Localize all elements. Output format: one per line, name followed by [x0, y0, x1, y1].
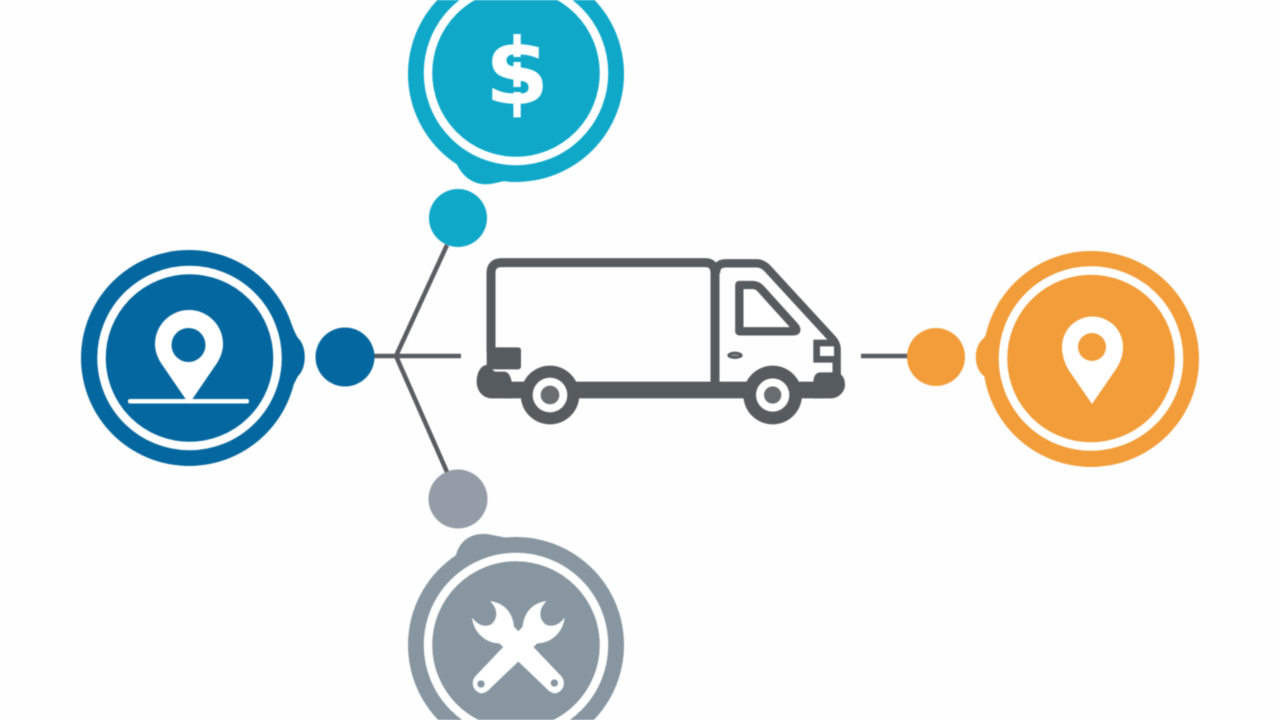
van door handle: [727, 352, 743, 359]
van rear box: [487, 347, 521, 369]
van cab outline: [716, 263, 837, 377]
teal white ring: [428, 0, 604, 161]
orange connector dot: [907, 328, 965, 386]
grey white ring: [428, 557, 604, 720]
van front wheel: [743, 366, 802, 424]
node: destination (orange): [907, 251, 1199, 467]
grey outer disc with bump: [408, 534, 624, 720]
teal outer disc with bump: [408, 0, 624, 184]
orange white ring: [1003, 270, 1179, 446]
blue white ring: [102, 270, 278, 446]
icon: crossed wrenches: [472, 601, 565, 693]
van window: [739, 285, 796, 331]
teal connector dot: [429, 189, 487, 247]
blue connector dot: [316, 328, 374, 386]
node: maintenance (grey): [408, 470, 624, 720]
van chassis and bumpers: [477, 365, 845, 398]
icon: dollar sign: $: [485, 19, 549, 126]
icon: location pin: [1062, 316, 1123, 404]
grey connector dot: [428, 470, 488, 528]
van headlight: [817, 343, 834, 359]
node: cost (teal): [408, 0, 624, 247]
van cargo box outline: [491, 263, 715, 383]
icon: location pin on a ground line: [128, 310, 249, 404]
node: location start (blue): [81, 250, 374, 466]
van rear wheel: [521, 366, 579, 424]
connector lines: left branching: [372, 245, 461, 472]
connector line: right: [861, 354, 908, 358]
icon: delivery van: [477, 263, 845, 424]
orange outer disc with bump: [976, 251, 1199, 467]
blue outer disc with bump: [81, 250, 305, 466]
